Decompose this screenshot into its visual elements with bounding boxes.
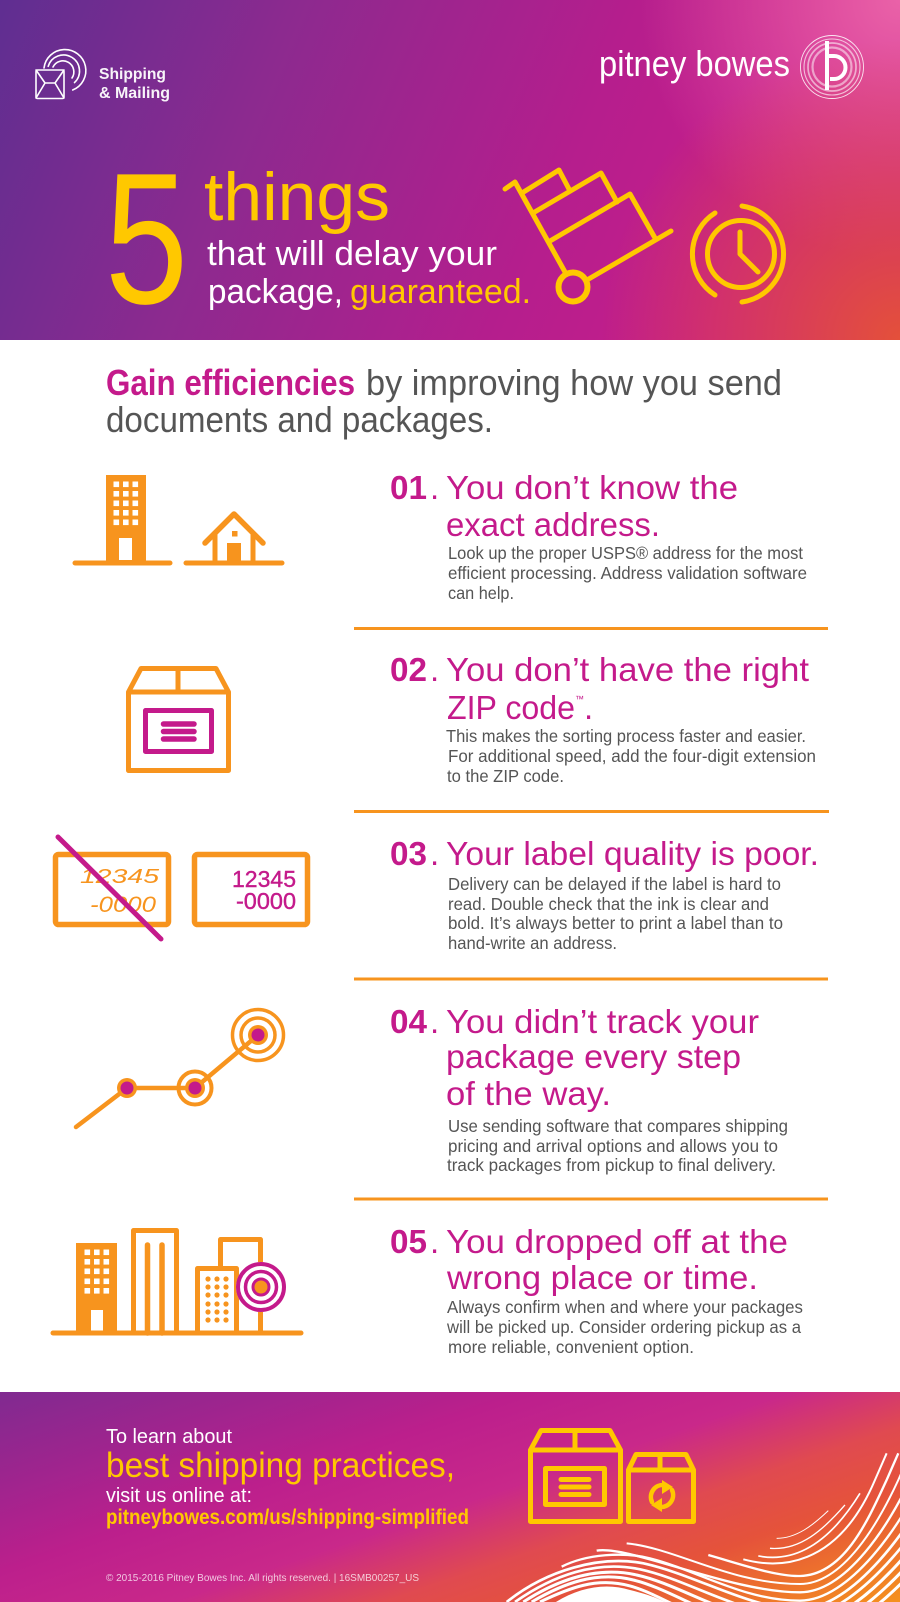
intro heading: by improving how you send [366,362,782,403]
intro heading: Gain efficiencies [106,362,355,403]
icon: refresh arrows [651,1480,673,1512]
copyright: © 2015-2016 Pitney Bowes Inc. All rights reserved. | 16SMB00257_US [106,1572,419,1584]
panel: item 03 [56,835,819,953]
call to action text: pitneybowes.com/us/shipping-simplified [106,1506,469,1529]
big number 5: 5 [105,134,188,343]
body 01 [448,543,807,603]
icon: tracking route [76,1010,284,1127]
icon: envelope with signal arcs [36,50,86,98]
intro heading [106,362,782,440]
body 03: hand-write an address. [448,933,617,953]
logo symbol [800,36,864,98]
heading 04: package every step [446,1038,741,1075]
heading 02: ™ [575,694,584,704]
heading 05 [390,1223,788,1296]
panel: footer [0,1392,900,1602]
body 04: Use sending software that compares shipping [448,1116,788,1136]
icon: office building and house [75,475,282,563]
heading 01: exact address. [446,506,660,543]
body 02 [446,726,816,786]
icon: hand truck with boxes [505,170,671,302]
body 02: For additional speed, add the four-digit extension [448,746,816,766]
heading 04: . [430,1003,439,1040]
heading 03: . [430,835,439,872]
heading 02: 02 [390,651,427,688]
call to action text: visit us online at: [106,1485,252,1507]
title: subtitle: package, [208,273,343,311]
call to action text [106,1426,469,1529]
body 05: will be picked up. Consider ordering pickup as a [446,1317,801,1337]
category label [99,66,170,102]
heading 03: Your label quality is poor. [446,835,819,872]
icon: illegible label crossed out: -0000 [90,892,157,917]
heading 02: You don’t have the right [446,651,809,688]
icon: illegible label crossed out [56,837,168,939]
body 01: efficient processing. Address validation software [448,563,807,583]
heading 05: You dropped off at the [446,1223,788,1260]
icon: city with target [53,1230,301,1333]
heading 02: ZIP code [447,689,575,726]
icon: clear label: 12345 [232,866,296,892]
heading 01 [390,469,738,543]
heading 03: 03 [390,835,427,872]
title: subtitle: guaranteed. [350,273,531,311]
icon: two shipping boxes [530,1430,694,1522]
logo wordmark: pitney bowes [599,43,790,84]
body 04: pricing and arrival options and allows you to [448,1136,778,1156]
body 05 [446,1297,803,1357]
heading 04: 04 [390,1003,428,1040]
body 03: bold. It’s always better to print a label than to [448,913,783,933]
panel: item 02 [128,651,816,786]
category label: & Mailing [99,85,170,102]
title: subtitle: that will delay your [207,235,497,273]
body 03 [448,874,783,953]
heading 04: You didn’t track your [446,1003,759,1040]
title: things: things [204,159,390,235]
body 03: Delivery can be delayed if the label is hard to [448,874,781,894]
heading 02 [390,651,809,726]
panel: item 01 [75,469,807,603]
panel: item 05 [53,1223,803,1357]
body 02: This makes the sorting process faster and easier. [446,726,806,746]
heading 04: of the way. [446,1075,611,1112]
category label: Shipping [99,66,166,83]
panel: item 04 [76,1003,788,1175]
heading 05: . [430,1223,439,1260]
icon: box with label [128,668,228,770]
body 02: to the ZIP code. [447,766,564,786]
heading 04 [390,1003,759,1112]
heading 01: . [430,469,439,506]
icon: illegible label crossed out: 12345 [80,866,160,888]
body 05: Always confirm when and where your packages [447,1297,803,1317]
body 03: read. Double check that the ink is clear and [448,894,769,914]
icon: clear label: -0000 [236,888,296,914]
body 01: can help. [448,583,514,603]
intro heading: documents and packages. [106,399,493,440]
white wave lines [507,1453,900,1602]
icon: clear label [194,854,308,924]
panel: header [0,0,900,343]
heading 05: wrong place or time. [446,1259,758,1296]
title: subtitle [207,235,531,311]
heading 02: . [430,651,439,688]
header gradient background [0,0,900,340]
body 04: track packages from pickup to final delivery. [447,1155,776,1175]
heading 01: You don’t know the [446,469,738,506]
body 01: Look up the proper USPS® address for the most [448,543,803,563]
call to action text: best shipping practices, [106,1446,455,1485]
body 05: more reliable, convenient option. [448,1337,694,1357]
call to action text: To learn about [106,1426,232,1448]
footer gradient background [0,1392,900,1602]
heading 05: 05 [390,1223,427,1260]
icon: clock [692,206,784,302]
body 04 [447,1116,788,1175]
heading 02: . [584,689,593,726]
heading 01: 01 [390,469,427,506]
